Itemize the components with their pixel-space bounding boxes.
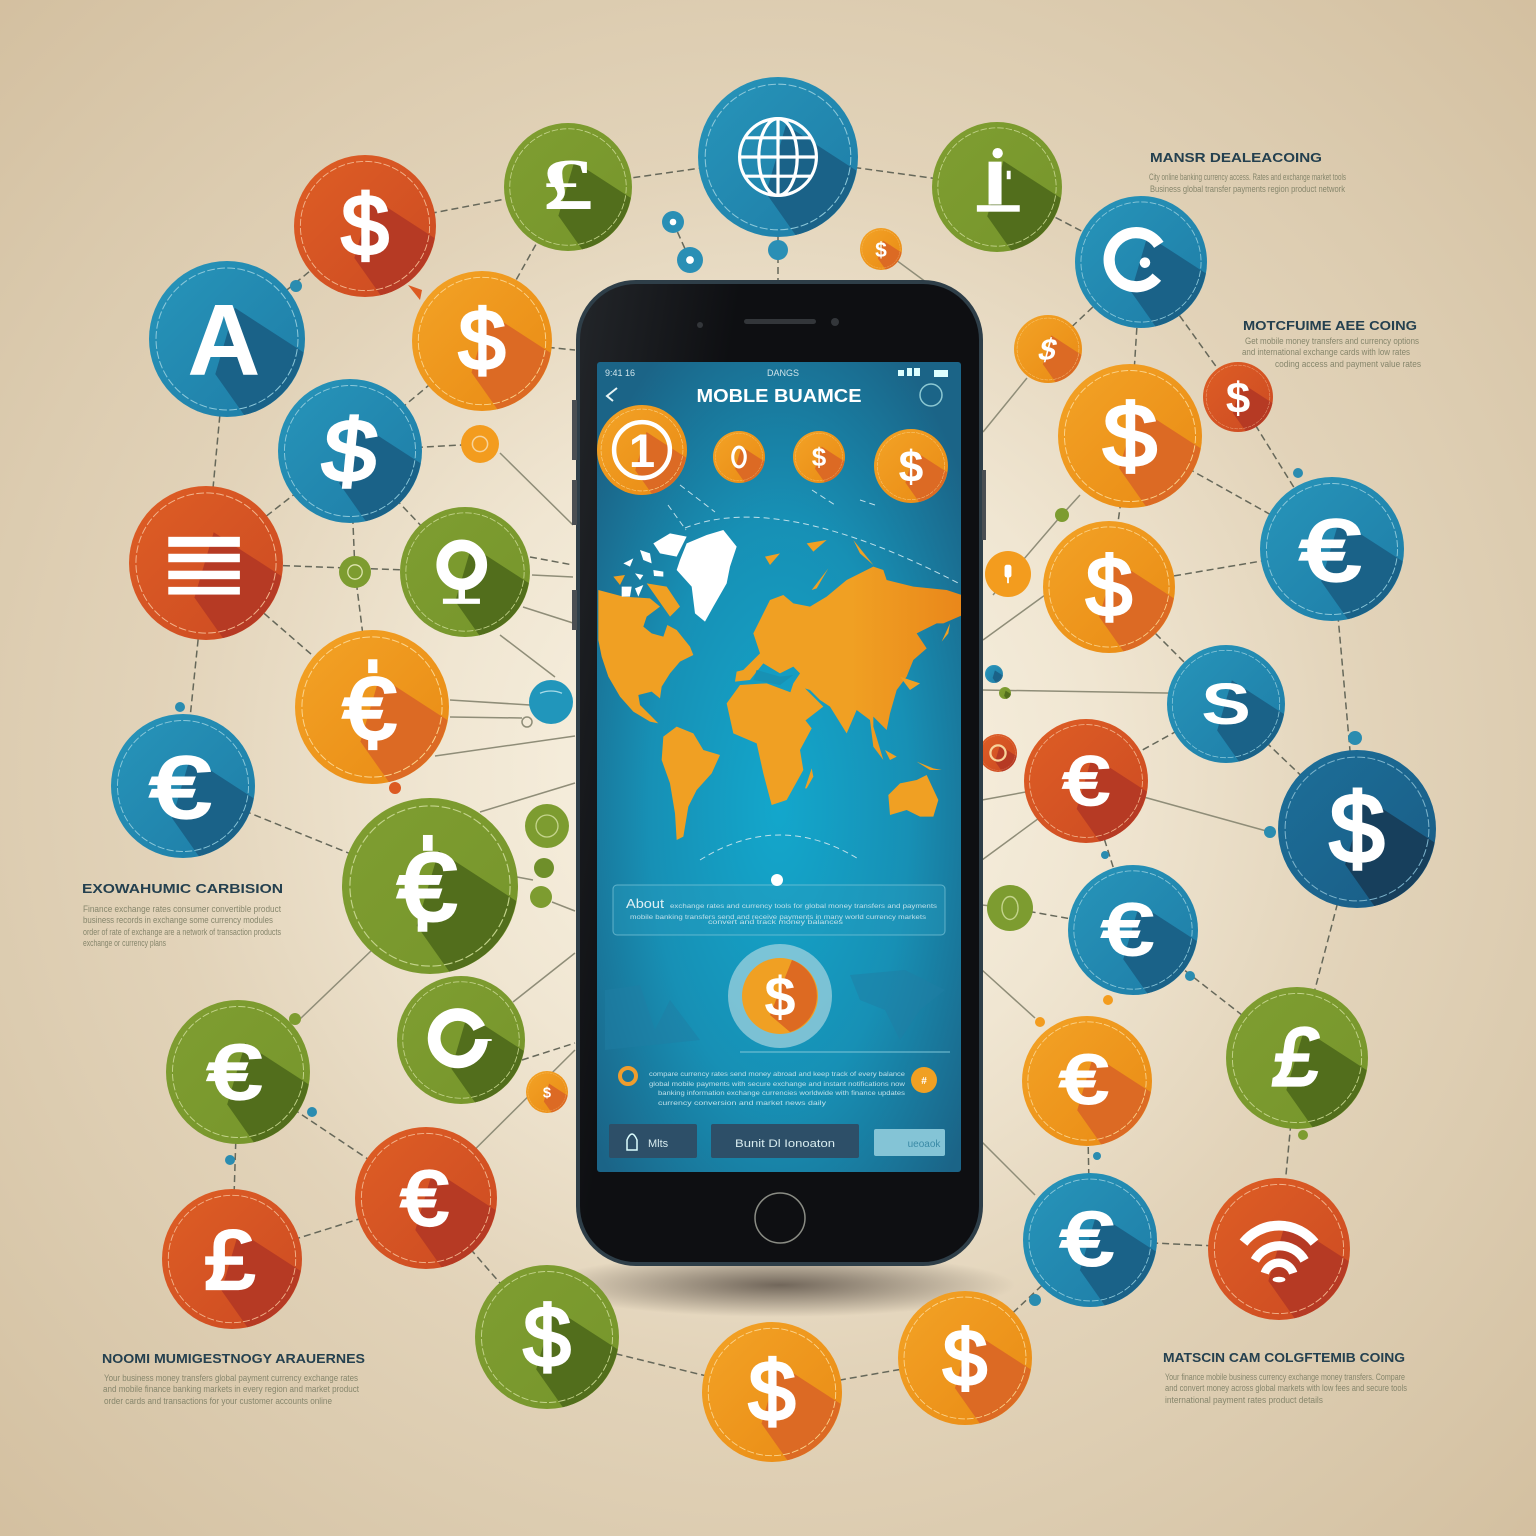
coin: euro red right <box>1024 719 1148 843</box>
label: left: exchange or currency plans <box>83 938 166 948</box>
coin: dollar orange: $ <box>459 293 505 387</box>
label: top right <box>1149 150 1346 194</box>
description text: currency conversion and market news daily <box>658 1101 826 1107</box>
coin: dollar small red: $ <box>1226 374 1250 423</box>
label: upper right: and international exchange cards with low rates <box>1242 347 1410 357</box>
coin: euro blue: € <box>150 738 210 836</box>
coin: small orange: $ <box>1035 332 1061 367</box>
central dollar coin <box>728 944 832 1048</box>
description text: banking information exchange currencies worldwide with finance updates <box>658 1091 905 1097</box>
coin: pound green: £ <box>542 144 594 225</box>
small screen coin <box>911 1067 937 1093</box>
screen coin 4 <box>874 429 948 503</box>
home button <box>755 1193 805 1243</box>
label: bottom right: Your finance mobile business currency exchange money transfers. Compare <box>1165 1372 1405 1382</box>
coin: euro orange right: € <box>1060 1042 1107 1118</box>
info panel: convert and track money balances <box>708 920 843 926</box>
coin: wifi red <box>1208 1178 1350 1320</box>
coin: C green <box>397 976 525 1104</box>
status bar: 9:41 16 <box>605 368 635 378</box>
back arrow <box>607 388 617 401</box>
world map <box>598 530 967 840</box>
screen coin 1: 1 <box>629 425 655 478</box>
button right: ueoaok <box>908 1139 941 1150</box>
label: bottom right: and convert money across global markets with low fees and secure tools <box>1165 1383 1407 1393</box>
button right <box>874 1129 945 1156</box>
coin: C blue <box>1075 196 1207 328</box>
small screen coin: # <box>921 1076 927 1087</box>
profile icon <box>920 384 942 406</box>
coin: S blue <box>278 379 422 523</box>
coin: S blue: $ <box>318 402 382 500</box>
australia <box>888 775 938 817</box>
description text: global mobile payments with secure exchange and instant notifications now <box>649 1082 906 1088</box>
coin: euro green: € <box>208 1031 261 1115</box>
info panel: About <box>626 896 664 911</box>
ring node <box>522 717 532 727</box>
coin: pound red: £ <box>204 1214 255 1306</box>
button left <box>609 1124 697 1158</box>
coin: dollar red: $ <box>341 178 389 273</box>
small coins: $ <box>875 239 887 262</box>
coin: dollar orange <box>412 271 552 411</box>
screen coin 1 <box>597 405 687 495</box>
small coins: $ <box>543 1085 551 1101</box>
screen title: MOBLE BUAMCE <box>696 386 862 406</box>
label: bottom left <box>102 1351 365 1406</box>
speaker and camera <box>697 318 839 328</box>
coin: t green <box>1226 987 1368 1129</box>
coin: B orange: $ <box>1103 386 1157 485</box>
eurasia <box>735 567 967 760</box>
label: bottom left: order cards and transactions for your customer accounts online <box>104 1396 332 1406</box>
phone <box>572 282 986 1264</box>
coin: euro red: € <box>401 1156 448 1242</box>
coin: dollar red <box>294 155 436 297</box>
coin: euro blue far right: € <box>1300 501 1360 599</box>
label: bottom left: Your business money transfers global payment currency exchange rates <box>104 1373 358 1383</box>
label: top right: Business global transfer payments region product network <box>1150 184 1345 194</box>
coin: euro green <box>166 1000 310 1144</box>
coin: euro blue bottom: € <box>1061 1197 1113 1281</box>
sea inlet <box>753 670 793 685</box>
coin: Q green <box>400 507 530 637</box>
status bar <box>605 368 948 378</box>
label: upper right: coding access and payment value rates <box>1275 359 1421 369</box>
coin: B orange <box>1058 364 1202 508</box>
central dollar coin: $ <box>764 965 796 1028</box>
small coins <box>339 211 1033 1113</box>
coin: dollar orange bottom right: $ <box>943 1313 987 1402</box>
coin: i green <box>932 122 1062 252</box>
coin: dollar orange right <box>1043 521 1175 653</box>
info panel: mobile banking transfers send and receive payments in many world currency markets <box>630 915 926 921</box>
label: left: Finance exchange rates consumer convertible product <box>83 904 281 914</box>
coin: euro red right: € <box>1063 743 1109 819</box>
phone ground shadow <box>545 1253 1015 1317</box>
coin: dollar dark blue <box>1278 750 1436 908</box>
screen coin 3 <box>793 431 845 483</box>
coin: S blue right: S <box>1201 672 1251 737</box>
label: bottom right: international payment rates product details <box>1165 1395 1323 1405</box>
coin: dollar orange bottom <box>702 1322 842 1462</box>
coin: globe <box>698 77 858 237</box>
coin: dollar green: $ <box>523 1290 571 1385</box>
africa <box>727 683 812 805</box>
coin: dollar green <box>475 1265 619 1409</box>
phone body <box>578 282 981 1264</box>
label: top right: City online banking currency access. Rates and exchange market tools <box>1149 172 1346 182</box>
label: upper right: MOTCFUIME AEE COING <box>1243 318 1417 333</box>
coin: euro blue bottom <box>1023 1173 1157 1307</box>
coin: S blue right <box>1167 645 1285 763</box>
label: upper right <box>1242 318 1421 369</box>
greenland <box>677 530 737 622</box>
coin: euro blue <box>111 714 255 858</box>
coin: t green: £ <box>1268 1012 1326 1103</box>
label: upper right: Get mobile money transfers and currency options <box>1245 336 1419 346</box>
coin: pound red <box>162 1189 302 1329</box>
screen <box>597 362 967 1172</box>
description text: compare currency rates send money abroad and keep track of every balance <box>649 1072 906 1078</box>
status bar: DANGS <box>767 368 799 378</box>
label: bottom left: and mobile finance banking markets in every region and market product <box>103 1384 359 1394</box>
madagascar <box>805 768 813 788</box>
info panel <box>613 874 945 935</box>
label: left: EXOWAHUMIC CARBISION <box>82 881 283 896</box>
islands <box>613 540 950 770</box>
info panel: exchange rates and currency tools for global money transfers and payments <box>670 904 937 910</box>
coin: euro orange <box>295 630 449 784</box>
label: left: order of rate of exchange are a network of transaction products <box>83 927 281 937</box>
label: top right: MANSR DEALEACOING <box>1150 150 1322 165</box>
coin: euro green large <box>342 798 518 974</box>
coin: euro blue far right <box>1260 477 1404 621</box>
phone side buttons <box>572 400 986 630</box>
coin: small orange <box>1014 315 1082 383</box>
faded map background <box>605 970 945 1050</box>
ring icon <box>620 1068 636 1084</box>
label: bottom left: NOOMI MUMIGESTNOGY ARAUERNES <box>102 1351 365 1366</box>
screen coin 4: $ <box>899 443 924 492</box>
coin: euro red <box>355 1127 497 1269</box>
label: bottom right: MATSCIN CAM COLGFTEMIB COING <box>1163 1350 1405 1365</box>
button left: Mlts <box>648 1138 669 1150</box>
coin: euro green large: € <box>398 835 456 940</box>
label: bottom right <box>1163 1350 1407 1405</box>
coin: euro blue right: € <box>1102 889 1153 971</box>
coin: euro orange: € <box>343 661 396 757</box>
coin: dollar orange bottom: $ <box>749 1344 795 1438</box>
coin: dollar dark blue: $ <box>1330 773 1384 883</box>
coin: dollar small red <box>1203 362 1273 432</box>
label: left <box>82 881 283 948</box>
screen coin 2 <box>713 431 765 483</box>
south america <box>662 727 720 840</box>
button middle: Bunit Dl Ionoaton <box>735 1138 835 1150</box>
small connector nodes <box>175 280 1362 1306</box>
arctic islands <box>622 533 687 597</box>
coin: euro orange right <box>1022 1016 1152 1146</box>
coin: dollar orange bottom right <box>898 1291 1032 1425</box>
divider <box>740 1051 950 1053</box>
description text <box>649 1072 906 1107</box>
coin: pound green <box>504 123 632 251</box>
coin: menu lines red <box>129 486 283 640</box>
dashed arcs <box>668 485 962 860</box>
coin: A blue: A <box>187 284 260 397</box>
button middle <box>711 1124 859 1158</box>
coin: euro blue right <box>1068 865 1198 995</box>
label: left: business records in exchange some currency modules <box>83 915 273 925</box>
north america <box>598 590 693 723</box>
screen coin 3: $ <box>812 442 827 472</box>
coin: dollar orange right: $ <box>1086 540 1132 633</box>
coin: A blue <box>149 261 305 417</box>
connection network <box>175 157 1362 1392</box>
